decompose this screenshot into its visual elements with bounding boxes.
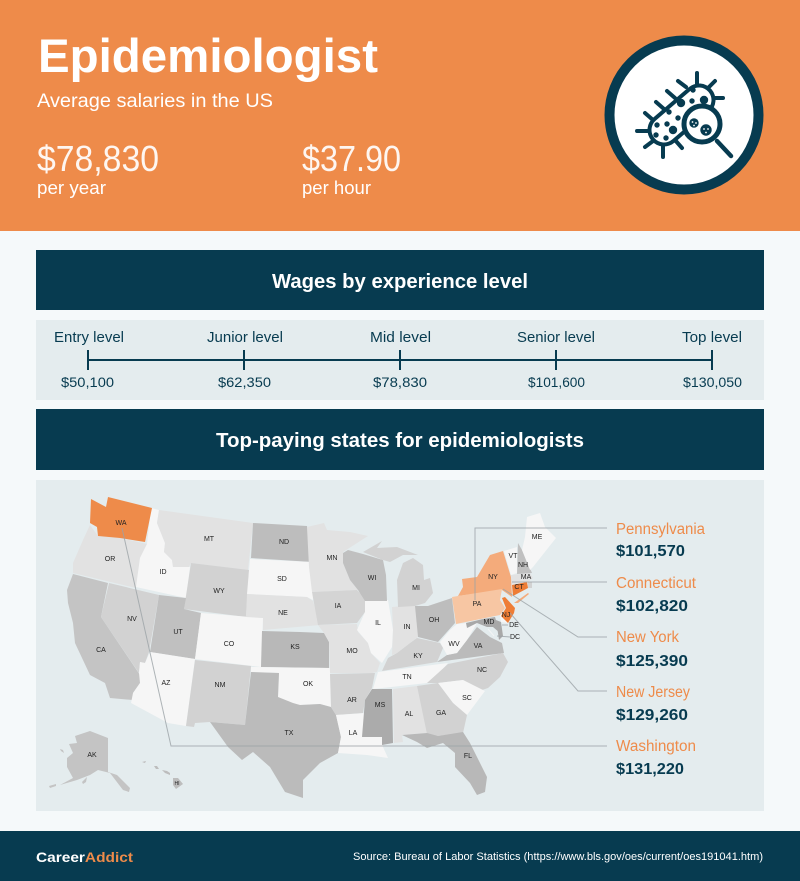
state labels: OK [303,681,313,688]
panel: experience timeline [36,320,764,400]
timeline labels: Top level [682,329,742,346]
state labels: NJ [502,612,510,619]
state labels: NC [477,667,487,674]
state labels: CA [96,647,106,654]
state labels: TN [402,674,412,681]
state labels: NE [278,610,288,617]
timeline axis [88,350,712,370]
state labels: IN [404,624,410,631]
timeline labels: Senior level [517,329,595,346]
state: New Jersey [616,684,690,724]
state: Washington [616,738,696,778]
state: Washington highlighted [90,497,152,542]
state labels: WI [368,575,376,582]
state labels: MT [204,536,215,543]
state labels: CO [224,641,235,648]
panel: US map [36,480,764,811]
state labels: ME [532,534,543,541]
state labels: MN [327,555,337,562]
hourly salary: per hour [302,178,371,198]
state: New Jersey: New Jersey [616,684,690,701]
state labels: NM [215,682,226,689]
heading: wages by experience level: Wages by experience level [272,271,528,293]
state: Connecticut: Connecticut [616,575,697,592]
state labels: AK [87,752,97,759]
state labels: WA [115,520,127,527]
state: Washington: Washington [616,738,696,755]
state labels: PA [473,601,482,608]
state labels: TX [285,730,294,737]
state labels: OR [105,556,115,563]
state: Pennsylvania: Pennsylvania [616,521,705,538]
state: Pennsylvania: $101,570 [616,543,685,560]
annual salary: per year [37,178,106,198]
state labels: KS [290,644,300,651]
heading: top-paying states: Top-paying states for epidemiologists [216,430,584,452]
state: Connecticut: $102,820 [616,598,688,615]
state labels: WV [448,641,460,648]
footer [0,831,800,881]
state labels: VA [474,643,483,650]
state labels: WY [213,588,225,595]
heading: top-paying states [36,409,764,470]
hourly salary: $37.90 [302,138,401,179]
state labels: IL [375,620,381,627]
state labels: HI [174,781,180,787]
state: Washington: $131,220 [616,761,684,778]
heading: wages by experience level [36,250,764,310]
annual salary: $78,830 [37,138,159,179]
title: Epidemiologist [38,29,378,82]
map states [49,508,556,798]
annual salary [37,138,159,198]
state labels: DE [509,622,519,629]
state labels: MI [412,585,420,592]
timeline values: $78,830 [373,374,427,390]
state labels: VT [509,553,518,560]
state: Pennsylvania [616,521,705,560]
state labels: ND [279,539,289,546]
state labels: FL [464,753,472,760]
state: New York: $125,390 [616,653,688,670]
state labels: MO [346,648,358,655]
state labels: UT [173,629,183,636]
state labels: GA [436,710,446,717]
state labels: CT [514,584,524,591]
timeline labels: Junior level [207,329,283,346]
state labels: AL [405,711,413,718]
state labels: SC [462,695,472,702]
leader lines [122,528,607,746]
timeline values: $50,100 [61,374,114,390]
timeline labels: Entry level [54,329,124,346]
timeline values: $101,600 [528,374,585,390]
state labels: NY [488,574,498,581]
state labels: MD [484,619,494,626]
state labels: NH [518,562,528,569]
state: New Jersey: $129,260 [616,707,688,724]
state labels: MS [375,702,386,709]
timeline values: $130,050 [683,374,742,390]
hourly salary [302,138,401,198]
state labels: AZ [162,680,171,687]
state labels: LA [349,730,358,737]
timeline values: $62,350 [218,374,271,390]
state labels: ID [160,569,166,576]
state labels: MA [521,574,532,581]
header panel [0,0,800,231]
state labels: AR [347,697,357,704]
logo: Career Addict [36,849,133,865]
source: Source: Bureau of Labor Statistics (https://www.bls.gov/oes/current/oes191041.htm) [353,851,763,863]
icon: bacteria under magnifying glass [610,40,758,190]
state: Connecticut [616,575,697,615]
state labels: NV [127,616,137,623]
subtitle: Average salaries in the US [37,91,273,112]
state labels: DC [510,634,520,641]
state: New York [616,629,688,670]
state: New York: New York [616,629,679,646]
state labels: KY [413,653,423,660]
timeline labels: Mid level [370,329,431,346]
state labels: OH [429,617,439,624]
state labels [87,520,543,787]
timeline values [61,374,742,390]
state labels: SD [277,576,287,583]
state labels: IA [335,603,342,610]
timeline labels [54,329,742,346]
